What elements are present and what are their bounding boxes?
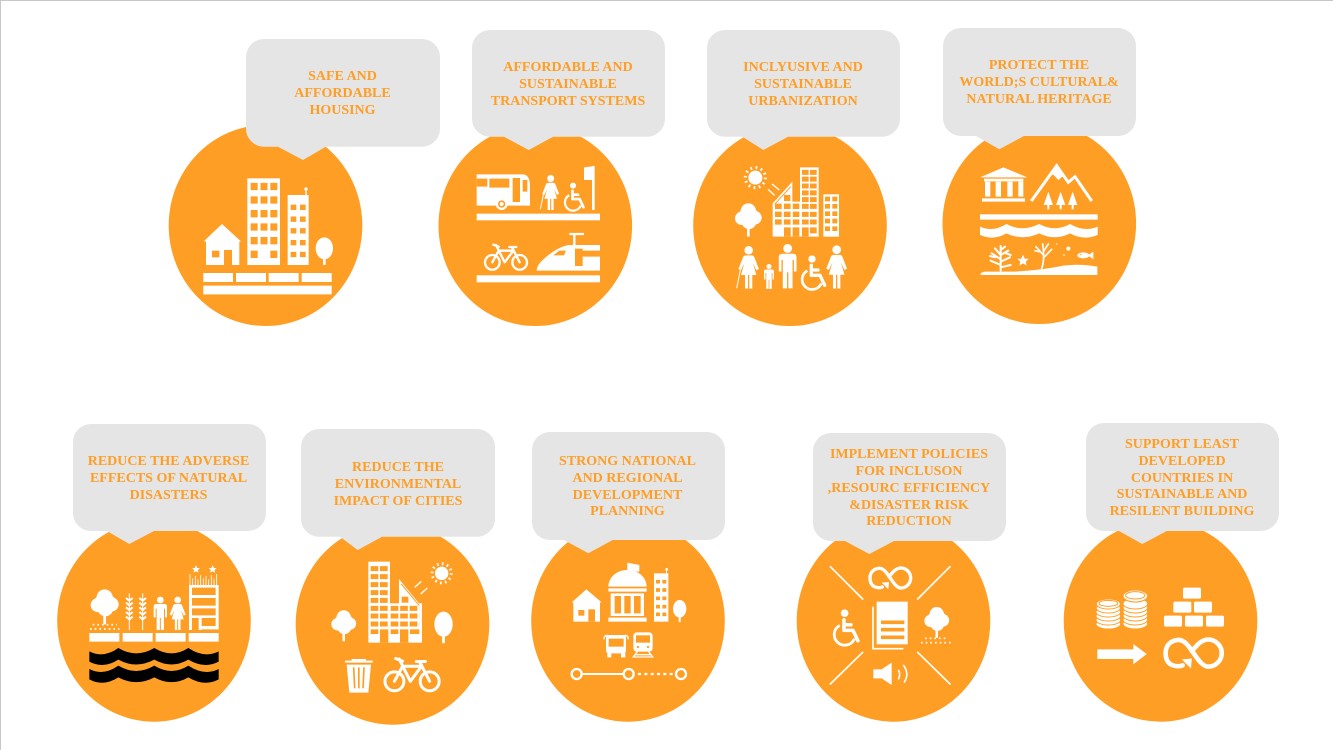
panel: reduce environmental impact of cities: [296, 429, 495, 725]
label text: AFFORDABLE AND: [503, 60, 633, 75]
speech bubble: [301, 429, 495, 550]
label text: DEVELOPED: [1138, 454, 1226, 469]
speech bubble: [73, 424, 266, 544]
icon: urbanization: [735, 167, 847, 289]
icon: housing: [203, 178, 333, 294]
speech bubble: [943, 28, 1136, 149]
label text: COUNTRIES IN: [1131, 471, 1233, 486]
label text: REDUCE THE ADVERSE: [88, 454, 249, 469]
speech bubble: [472, 30, 665, 150]
panel: support least developed countries: [1064, 423, 1279, 722]
circle: [438, 125, 632, 326]
circle: [57, 520, 251, 722]
label text: SAFE AND: [308, 69, 377, 84]
icon: green city: [331, 562, 453, 693]
icon: heritage: [980, 164, 1098, 275]
label text: PLANNING: [590, 504, 665, 519]
label text: NATURAL HERITAGE: [966, 92, 1112, 107]
label text: WORLD;S CULTURAL&: [959, 75, 1119, 90]
icon: transport: [477, 166, 600, 282]
panel: cultural and natural heritage: [943, 28, 1136, 324]
icon: disaster resilience: [89, 565, 219, 683]
label text: TRANSPORT SYSTEMS: [491, 94, 645, 109]
label text: INCLYUSIVE AND: [743, 60, 863, 75]
circle: [531, 520, 725, 722]
label text: AFFORDABLE: [294, 86, 391, 101]
label text: ,RESOURC EFFICIENCY: [828, 481, 990, 496]
label text: SUSTAINABLE AND: [1117, 487, 1247, 502]
circle: [1064, 520, 1257, 722]
speech bubble: [707, 30, 900, 150]
circle: [693, 125, 887, 326]
label text: AND REGIONAL: [572, 471, 683, 486]
speech bubble: [1086, 423, 1279, 544]
circle: [797, 520, 990, 722]
label text: RESILENT BUILDING: [1110, 504, 1255, 519]
panel: strong national and regional planning: [531, 432, 725, 722]
label text: FOR INCLUSON: [856, 464, 962, 479]
speech bubble: [246, 39, 440, 160]
circle: [943, 123, 1136, 324]
circle: [169, 125, 362, 326]
icon: policies: [830, 567, 951, 685]
label text: IMPACT OF CITIES: [334, 494, 463, 509]
panel: implement policies: [797, 433, 1006, 722]
label text: DISASTERS: [130, 488, 208, 503]
label text: &DISASTER RISK: [849, 498, 969, 513]
icon: finance and building: [1096, 588, 1224, 668]
circle: [296, 523, 489, 725]
label text: SUSTAINABLE: [519, 77, 617, 92]
speech bubble: [532, 432, 725, 553]
label text: REDUCE THE: [352, 460, 444, 475]
label text: DEVELOPMENT: [573, 488, 683, 503]
label text: URBANIZATION: [748, 94, 858, 109]
label text: HOUSING: [309, 103, 376, 118]
panel: affordable and sustainable transport: [438, 30, 665, 326]
label text: REDUCTION: [866, 514, 952, 529]
label text: EFFECTS OF NATURAL: [90, 471, 247, 486]
label text: ENVIRONMENTAL: [335, 477, 461, 492]
label text: IMPLEMENT POLICIES: [830, 447, 988, 462]
panel: inclusive and sustainable urbanization: [693, 30, 900, 326]
panel: reduce adverse effects of natural disasters: [57, 424, 266, 722]
label text: PROTECT THE: [989, 58, 1089, 73]
panel: safe and affordable housing: [169, 39, 440, 326]
icon: planning: [572, 563, 686, 679]
label text: STRONG NATIONAL: [559, 454, 696, 469]
label text: SUPPORT LEAST: [1125, 437, 1240, 452]
speech bubble: [813, 433, 1006, 554]
label text: SUSTAINABLE: [754, 77, 852, 92]
